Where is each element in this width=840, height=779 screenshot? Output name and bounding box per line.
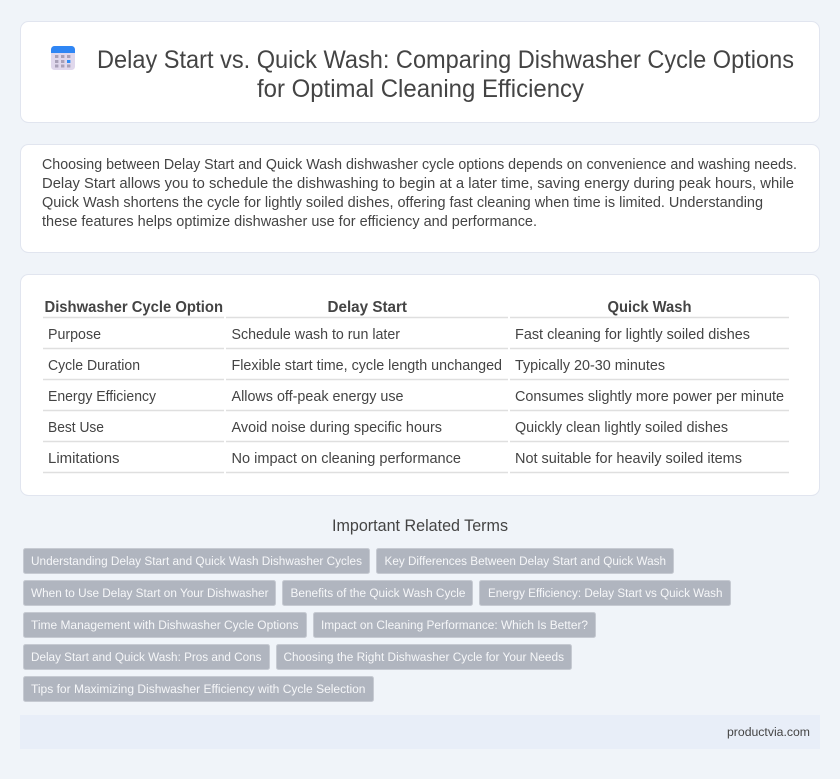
row: limitations: Limitations xyxy=(48,451,120,467)
tag xyxy=(24,644,270,670)
tag xyxy=(314,612,596,638)
tag: When to Use Delay Start on Your Dishwasher xyxy=(31,586,268,600)
intro paragraph: Delay Start allows you to schedule the dishwashing to begin at a later time, saving energy during peak hours, while xyxy=(42,176,794,192)
tag xyxy=(282,580,472,606)
row: energy efficiency: Allows off-peak energy use xyxy=(232,389,404,405)
title text xyxy=(97,46,794,103)
row: cycle duration: Flexible start time, cycle length unchanged xyxy=(232,358,502,374)
tag: Choosing the Right Dishwasher Cycle for Your Needs xyxy=(284,650,564,664)
tag: Time Management with Dishwasher Cycle Options xyxy=(31,618,298,632)
related term tags xyxy=(24,548,730,702)
tag: Understanding Delay Start and Quick Wash Dishwasher Cycles xyxy=(31,554,362,568)
row: energy efficiency: Consumes slightly more power per minute xyxy=(515,389,784,405)
table header xyxy=(44,299,692,316)
row: best use: Best Use xyxy=(48,420,104,436)
row: purpose xyxy=(48,327,750,343)
tag xyxy=(24,548,370,574)
panel: introduction xyxy=(20,144,820,252)
row: cycle duration: Cycle Duration xyxy=(48,358,140,374)
tag: Benefits of the Quick Wash Cycle xyxy=(290,586,466,600)
tag: Energy Efficiency: Delay Start vs Quick Wash xyxy=(488,586,723,600)
title text: Delay Start vs. Quick Wash: Comparing Dishwasher Cycle Options xyxy=(97,46,794,74)
row: purpose: Fast cleaning for lightly soiled dishes xyxy=(515,327,750,343)
row: energy efficiency: Energy Efficiency xyxy=(48,389,157,405)
row: best use xyxy=(48,420,728,436)
intro paragraph xyxy=(42,157,797,230)
table header: Dishwasher Cycle Option xyxy=(44,299,223,316)
heading: related terms: Important Related Terms xyxy=(332,517,508,535)
title text: for Optimal Cleaning Efficiency xyxy=(257,75,584,103)
icon: calendar xyxy=(51,46,75,70)
intro paragraph: Quick Wash shortens the cycle for lightly soiled dishes, offering fast cleaning when time is limited. Understanding xyxy=(42,195,763,211)
intro paragraph: these features helps optimize dishwasher use for efficiency and performance. xyxy=(42,214,537,230)
tag xyxy=(24,580,276,606)
tag xyxy=(276,644,572,670)
row: energy efficiency xyxy=(48,389,784,405)
tag: Tips for Maximizing Dishwasher Efficiency with Cycle Selection xyxy=(31,682,366,696)
tag: Key Differences Between Delay Start and Quick Wash xyxy=(384,554,666,568)
row: purpose: Schedule wash to run later xyxy=(232,327,400,343)
row: cycle duration xyxy=(48,358,665,374)
table header: Delay Start xyxy=(328,299,407,316)
intro paragraph: Choosing between Delay Start and Quick Wash dishwasher cycle options depends on convenience and washing needs. xyxy=(42,157,797,173)
table header: Quick Wash xyxy=(608,299,692,316)
footer xyxy=(20,715,820,749)
tag xyxy=(376,548,674,574)
panel: title xyxy=(20,22,820,122)
footer source text: productvia.com xyxy=(727,725,810,739)
row: limitations xyxy=(48,451,742,467)
tag xyxy=(24,612,306,638)
row: best use: Quickly clean lightly soiled dishes xyxy=(515,420,728,436)
row: limitations: No impact on cleaning performance xyxy=(232,451,461,467)
tag: Delay Start and Quick Wash: Pros and Cons xyxy=(31,650,262,664)
tag xyxy=(24,676,374,702)
row: limitations: Not suitable for heavily soiled items xyxy=(515,451,742,467)
tag: Impact on Cleaning Performance: Which Is Better? xyxy=(321,618,588,632)
panel: comparison table xyxy=(20,274,820,496)
row: cycle duration: Typically 20-30 minutes xyxy=(515,358,665,374)
row: best use: Avoid noise during specific hours xyxy=(232,420,442,436)
row: purpose: Purpose xyxy=(48,327,101,343)
tag xyxy=(480,580,730,606)
